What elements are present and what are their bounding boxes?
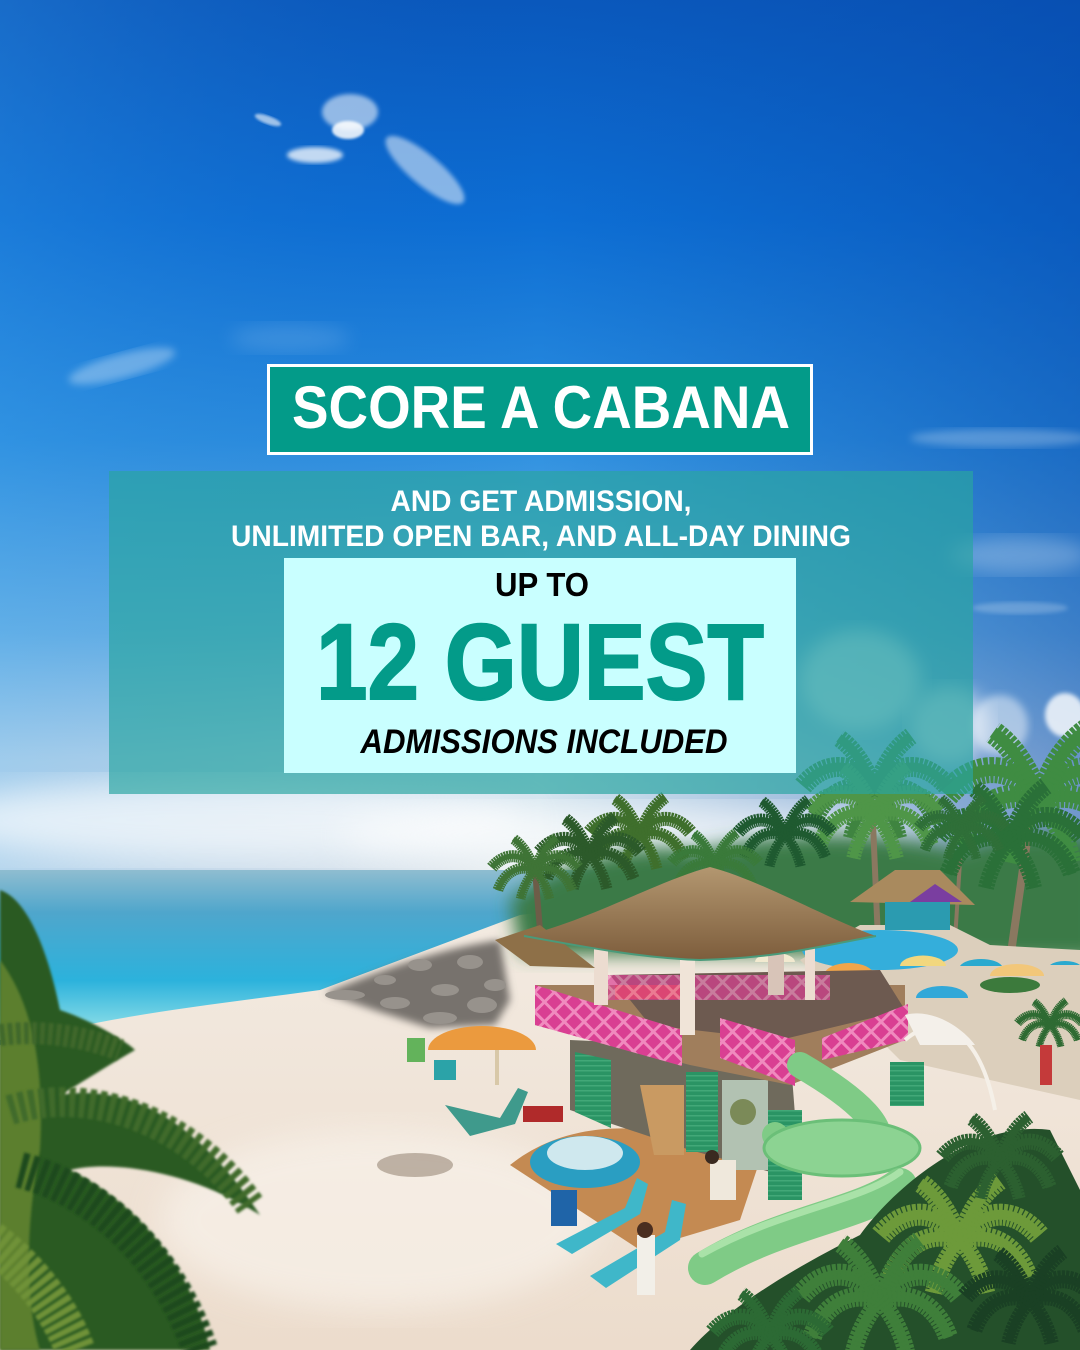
sky background [0, 0, 1080, 880]
subtitle text: AND GET ADMISSION, [390, 485, 692, 518]
deck and lower floor [510, 1128, 760, 1250]
clouds [0, 94, 1080, 865]
upper deck floor [535, 985, 905, 1085]
subtitle text [231, 485, 851, 553]
green slide [702, 1065, 920, 1268]
resort pool area [755, 870, 1080, 1100]
offer box [284, 558, 796, 773]
posts [594, 945, 608, 1005]
background palm trees [492, 730, 1080, 960]
foreground palm: lower right [690, 1117, 1080, 1350]
hot tub and loungers [377, 1013, 1052, 1295]
cabana [495, 867, 924, 1250]
title: score a cabana: SCORE A CABANA [292, 374, 790, 441]
rocks on shore [325, 940, 510, 1028]
ocean [0, 870, 620, 1040]
foreground palm: lower left [0, 890, 260, 1350]
offer: 12 guest: 12 GUEST [316, 601, 764, 722]
translucent teal panel [109, 471, 973, 794]
beach sand [0, 900, 1080, 1350]
thatched roof [495, 925, 595, 968]
offer: up to: UP TO [495, 566, 589, 603]
offer: admissions included: ADMISSIONS INCLUDED [360, 723, 728, 761]
subtitle text: UNLIMITED OPEN BAR, AND ALL-DAY DINING [231, 520, 851, 553]
pink railings [600, 975, 830, 1000]
